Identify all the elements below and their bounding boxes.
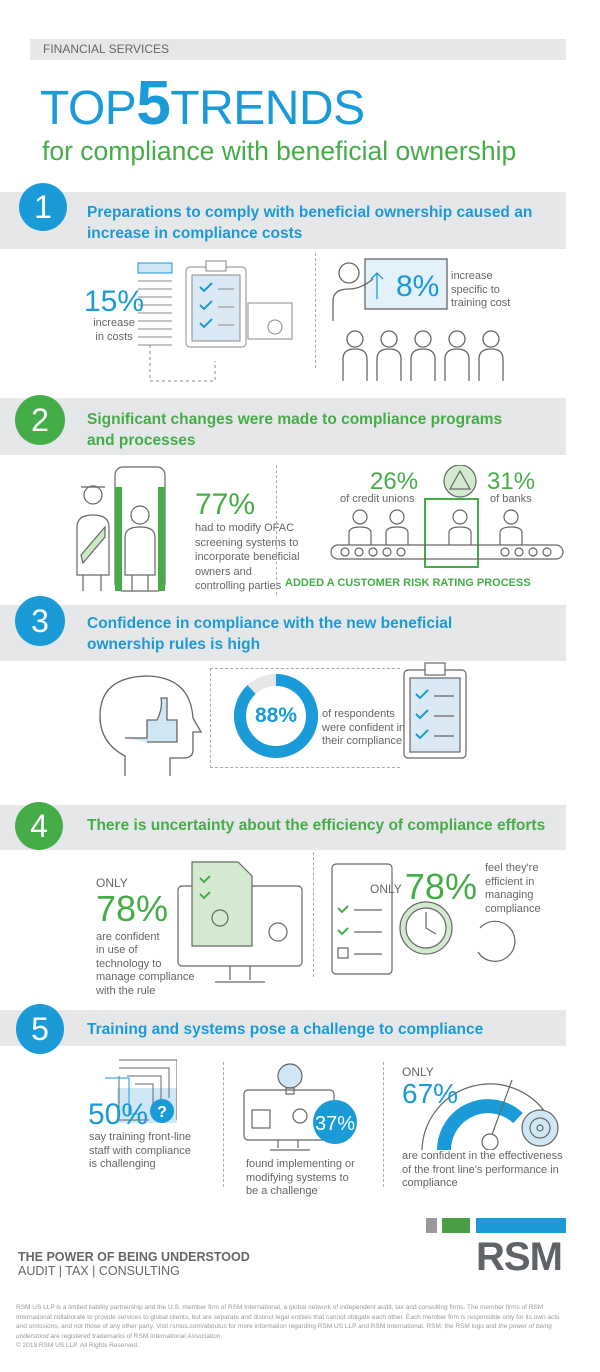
stat 8%: 8% — [396, 270, 439, 303]
tagline: AUDIT | TAX | CONSULTING — [18, 1264, 180, 1278]
stat 77%: 77% — [195, 488, 255, 521]
heading 3: ownership rules is high — [87, 636, 260, 653]
tagline: THE POWER OF BEING UNDERSTOOD — [18, 1250, 250, 1264]
section 4: feel they're — [485, 862, 538, 874]
section 3: of respondents — [322, 708, 395, 720]
stat 78% left: manage compliance — [96, 971, 194, 983]
section 5: compliance — [402, 1177, 458, 1189]
section 5: modifying systems to — [246, 1172, 349, 1184]
stat 15%: in costs — [95, 330, 133, 342]
section 4: efficient in — [485, 876, 534, 888]
section 5: of the front line's performance in — [402, 1164, 559, 1176]
divider — [315, 253, 316, 368]
icon: clipboard — [403, 662, 467, 759]
stat 67%: ONLY — [402, 1065, 434, 1079]
section 2: had to modify OFAC — [195, 522, 294, 534]
RSM logo — [426, 1218, 566, 1279]
stat 15%: 15% — [84, 285, 144, 318]
section 1 — [0, 183, 566, 382]
icon: head thumbs up — [99, 675, 202, 776]
stat 78% left: ONLY — [96, 876, 128, 890]
stat 78% left — [96, 876, 194, 996]
icon: presenter and audience — [332, 258, 504, 381]
section 5: say training front-line — [89, 1131, 191, 1143]
section 2 — [0, 395, 566, 595]
section 1: specific to — [451, 284, 500, 296]
section 1: increase — [451, 270, 493, 282]
stat 15% — [84, 285, 144, 342]
number 4: 4 — [30, 808, 48, 844]
number 1 — [19, 183, 67, 231]
heading 3: Confidence in compliance with the new beneficial — [87, 615, 452, 632]
section 2: controlling parties — [195, 580, 281, 592]
title: TOP5TRENDS — [40, 69, 365, 138]
number 5 — [16, 1004, 64, 1054]
section 3: 88% — [255, 704, 297, 727]
heading 4: There is uncertainty about the efficiency of compliance efforts — [87, 817, 545, 834]
caption: ADDED A CUSTOMER RISK RATING PROCESS — [285, 577, 531, 589]
icon: monitor lightbulb gear: 37% — [315, 1113, 355, 1135]
icon: monitor lightbulb gear — [243, 1063, 357, 1151]
section 2: screening systems to — [195, 536, 298, 548]
stats 26% 31%: 26% — [370, 468, 418, 495]
number 3 — [15, 596, 65, 646]
section 5: staff with compliance — [89, 1144, 191, 1156]
stat 78% left: in use of — [96, 944, 138, 956]
icon: monitor and document — [177, 861, 303, 983]
section 5: are confident in the effectiveness — [402, 1150, 563, 1162]
RSM logo: RSM — [476, 1235, 562, 1279]
number 3: 3 — [31, 603, 49, 639]
section 5: be a challenge — [246, 1185, 318, 1197]
heading 1 — [87, 204, 532, 242]
number 1: 1 — [34, 189, 52, 225]
stat 78% left: technology to — [96, 958, 161, 970]
section 1: training cost — [451, 297, 510, 309]
number 4 — [15, 802, 63, 850]
stat 78% right: ONLY 78% — [370, 866, 477, 907]
tagline — [18, 1250, 250, 1278]
stat 78% left: are confident — [96, 930, 160, 942]
icon: guard and scanner — [76, 466, 166, 592]
heading 5: Training and systems pose a challenge to compliance — [87, 1021, 483, 1038]
disclaimer: RSM US LLP is a limited liability partnership and the U.S. member firm of RSM International, a global network of independent audit, tax and consulting firms. The member firms of RSM International collaborate to provide services to global clients, but are separate and distinct legal entities that cannot obligate each other. Each member firm is responsible only for its own acts and omissions, and not those of any other party. Visit rsmus.com/aboutus for more information regarding RSM US LLP and RSM International. RSM, the RSM logo and the power of being understood are registered trademarks of RSM International Association. — [16, 1304, 559, 1340]
section 2: owners and — [195, 566, 252, 578]
number 2 — [15, 395, 65, 445]
icon: maze: ? — [157, 1104, 167, 1121]
section 3: were confident in — [322, 722, 405, 734]
section 4: compliance — [485, 902, 541, 914]
section 5 — [0, 1004, 566, 1197]
heading 2 — [87, 411, 502, 449]
donut 88% — [210, 668, 400, 768]
heading 3 — [87, 615, 452, 653]
section 2: of credit unions — [340, 493, 415, 505]
subtitle: for compliance with beneficial ownership — [42, 136, 516, 166]
icon: money stack and clipboard — [138, 260, 292, 382]
heading 2: Significant changes were made to compliance programs — [87, 411, 502, 428]
number 2: 2 — [31, 402, 49, 438]
section 2: of banks — [490, 493, 532, 505]
section 2: 31% — [487, 468, 535, 495]
heading 2: and processes — [87, 432, 196, 449]
section 4: managing — [485, 889, 533, 901]
stat 78% left: with the rule — [96, 984, 155, 996]
heading 1: increase in compliance costs — [87, 225, 302, 242]
stat 15%: increase — [93, 317, 135, 329]
section 3 — [0, 596, 566, 776]
section 3: their compliance — [322, 735, 402, 747]
stat 78% left: 78% — [96, 888, 168, 928]
section 2: incorporate beneficial — [195, 551, 300, 563]
stat 50%: 50% — [88, 1098, 148, 1131]
icon: stopwatch clipboard — [331, 863, 516, 975]
icon: gauge and target — [421, 1080, 559, 1150]
header band: FINANCIAL SERVICES — [43, 42, 169, 56]
section 4 — [0, 802, 566, 996]
section 5: is challenging — [89, 1158, 156, 1170]
number 5: 5 — [31, 1011, 49, 1047]
heading 1: Preparations to comply with beneficial ownership caused an — [87, 204, 532, 221]
header band — [30, 39, 566, 60]
icon: conveyor with warning — [330, 465, 564, 568]
stat 67%: 67% — [402, 1078, 458, 1108]
icon: maze — [105, 1060, 177, 1123]
section 5: found implementing or — [246, 1158, 355, 1170]
disclaimer: © 2019 RSM US LLP. All Rights Reserved. — [16, 1342, 139, 1349]
